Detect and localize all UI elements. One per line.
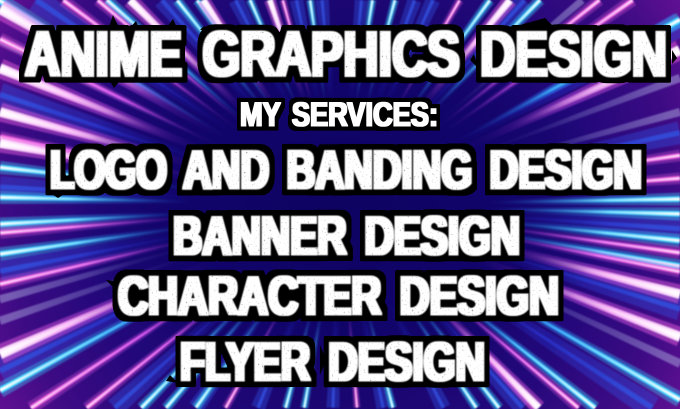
service: Banner Design: BANNER DESIGN bbox=[173, 204, 520, 266]
service: Flyer Design: FLYER DESIGN bbox=[180, 330, 485, 392]
subheading: My Services: MY SERVICES: bbox=[240, 96, 438, 134]
dark centre of the burst bbox=[70, 20, 610, 390]
